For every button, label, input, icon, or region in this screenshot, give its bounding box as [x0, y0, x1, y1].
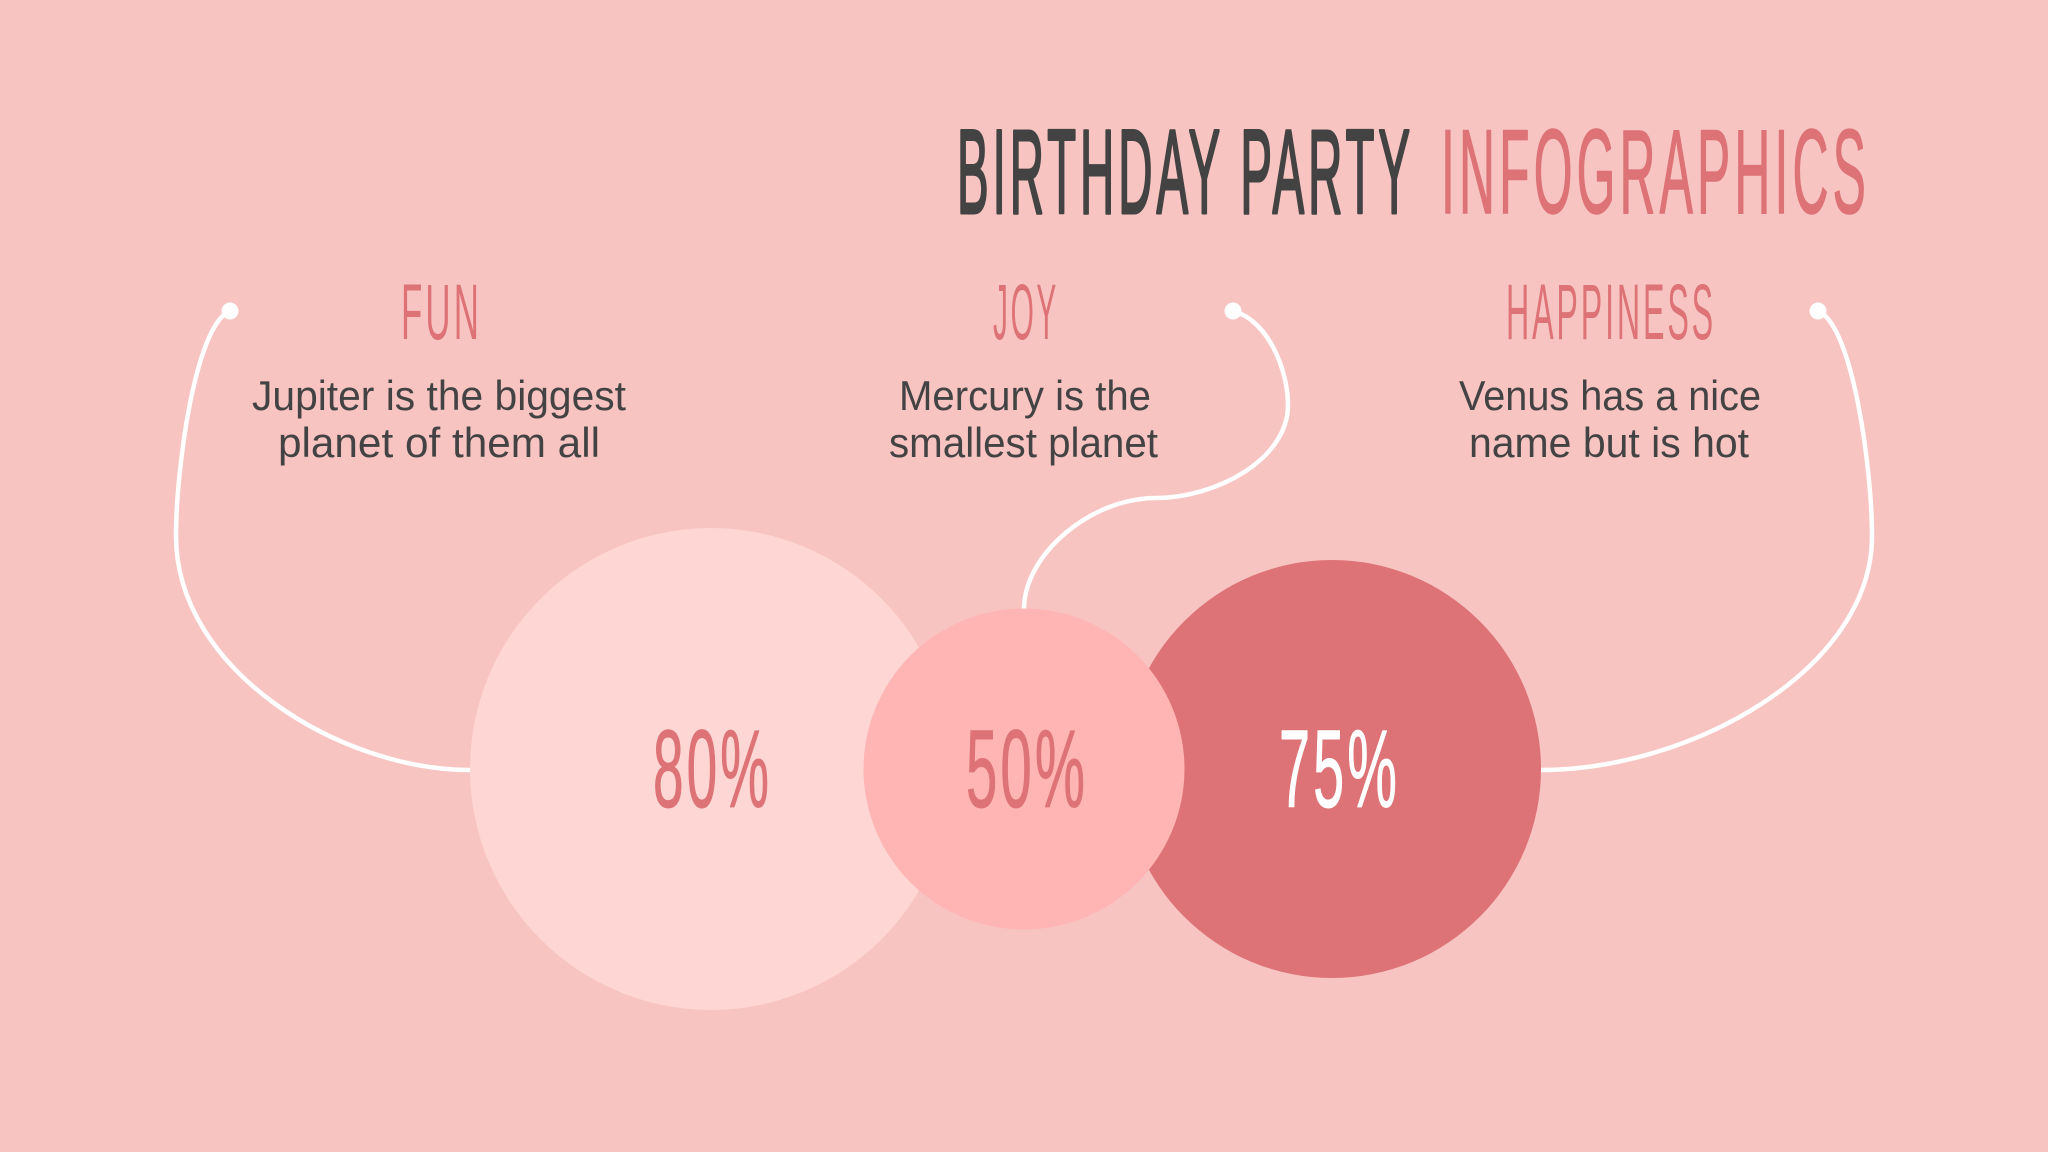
circle: fun 80%: 80%: [653, 708, 772, 831]
panel: fun text: FUN: [401, 267, 482, 356]
connector: fun: [176, 302, 470, 770]
panel: joy text: [889, 267, 1158, 466]
circle: happiness 75%: [1123, 560, 1541, 978]
connector: happiness: [1541, 302, 1872, 770]
circle: joy 50%: 50%: [966, 708, 1088, 831]
description: joy: [889, 372, 1158, 466]
description: joy: smallest planet: [889, 419, 1158, 466]
circle: fun 80%: [470, 528, 952, 1010]
description: fun: [252, 372, 626, 466]
text: HAPPINESS: [1506, 267, 1716, 356]
description: fun: planet of them all: [278, 419, 600, 466]
description: happiness: Venus has a nice: [1459, 372, 1761, 419]
panel: joy text: JOY: [993, 267, 1059, 356]
connector: joy: [1024, 302, 1288, 609]
circle: happiness 75%: 75%: [1279, 708, 1400, 831]
panel: happiness text: [1459, 267, 1761, 466]
description: fun: Jupiter is the biggest: [252, 372, 626, 419]
circle: joy 50%: [864, 608, 1184, 930]
panel: fun text: [252, 267, 626, 466]
description: happiness: name but is hot: [1469, 419, 1749, 466]
description: happiness: [1459, 372, 1761, 466]
description: joy: Mercury is the: [899, 372, 1151, 419]
